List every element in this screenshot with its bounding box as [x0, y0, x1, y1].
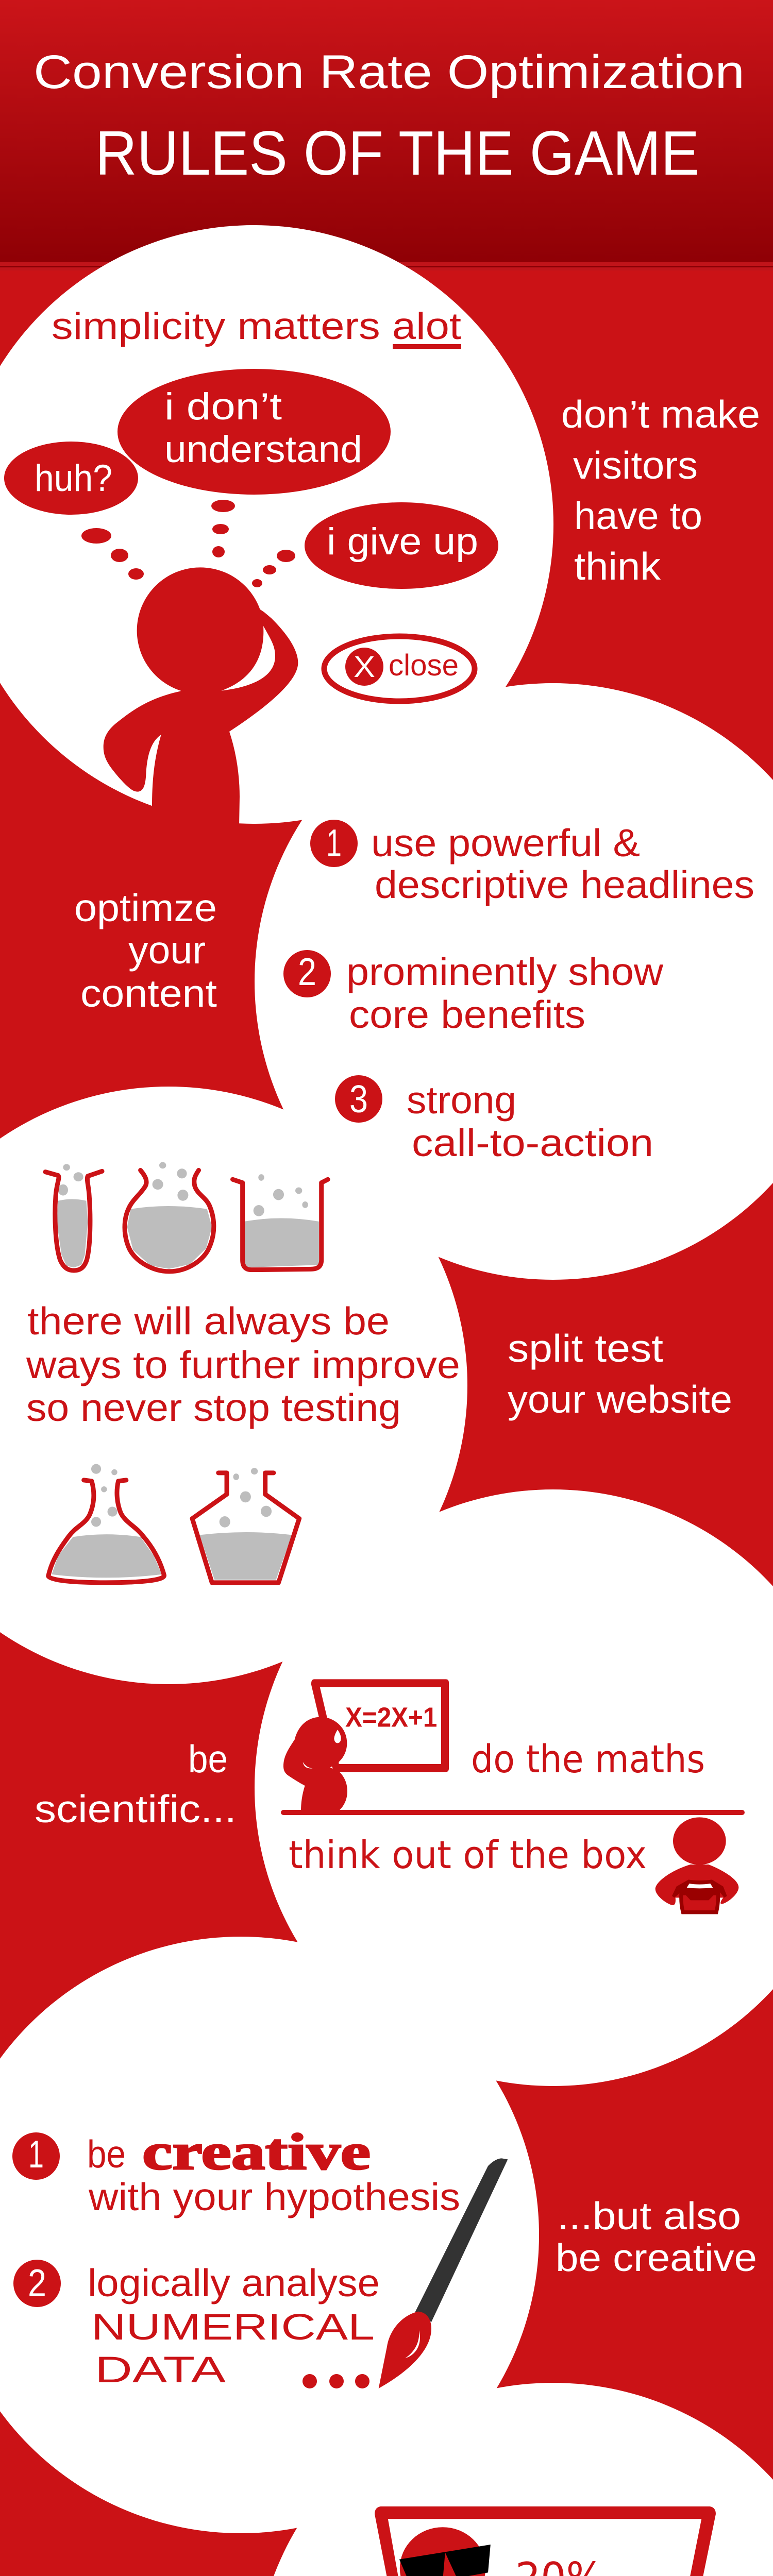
list item 2: logically analyse numerical data: DATA: [95, 2350, 226, 2391]
title: [33, 46, 745, 188]
side text: optimze your content: content: [80, 972, 217, 1015]
side text: be scientific...: be: [188, 1737, 228, 1781]
side text: optimze your content: optimze: [74, 886, 217, 929]
text: there will always be ways to further improve so never stop testing: there will always be: [27, 1299, 390, 1343]
list item 2: prominently show: [346, 950, 664, 993]
list item 2: 2: [298, 950, 316, 993]
text: do the maths: do the maths: [471, 1737, 705, 1782]
side text: ...but also be creative: [556, 2194, 757, 2279]
thought bubble: i don't understand: understand: [164, 429, 362, 470]
list item 3: call-to-action: [412, 1121, 653, 1164]
thought dots: [81, 500, 295, 587]
thought bubble: huh?: [4, 442, 138, 515]
list item 1: be creative with your hypothesis: [12, 2123, 460, 2218]
side text: be scientific...: scientific...: [35, 1787, 237, 1831]
icon: person at blackboard: [283, 1679, 449, 1811]
side text: split test your website: your website: [508, 1378, 732, 1421]
list item 2: core benefits: [349, 993, 585, 1036]
list item 2: [283, 950, 664, 1036]
side text: don't make visitors have to think: visitors: [573, 444, 698, 487]
illustration: banner ad with person in sunglasses: [375, 2506, 716, 2576]
panel: banner blindness: [17, 2506, 717, 2576]
panel: split test: [26, 1162, 732, 1583]
icon: lab flasks row two: [48, 1464, 299, 1583]
list item 1: be creative with your hypothesis: with your hypothesis: [88, 2175, 460, 2218]
text: there will always be ways to further improve so never stop testing: so never stop testing: [26, 1386, 401, 1429]
panel: optimize your content: [74, 820, 754, 1164]
side text: don't make visitors have to think: have to: [574, 494, 702, 537]
side text: ...but also be creative: ...but also: [557, 2194, 741, 2238]
thought bubble: i give up: i give up: [327, 521, 478, 563]
list item 1: be creative with your hypothesis: creative: [142, 2123, 371, 2180]
panel: simplicity: [4, 306, 760, 826]
side text: don't make visitors have to think: think: [574, 545, 661, 588]
icon: confused person scratching head: [104, 567, 298, 826]
list item 1: descriptive headlines: [375, 863, 754, 906]
thought bubble: i don't understand: i don’t: [164, 386, 282, 428]
side text: optimze your content: [74, 886, 217, 1015]
divider shelf: [281, 1810, 745, 1815]
thought bubble: i don't understand: [117, 369, 391, 495]
title: RULES OF THE GAME: [95, 118, 699, 188]
icon: paint brush: [379, 2158, 508, 2388]
text: think out of the box: think out of the box: [289, 1833, 647, 1877]
list item 1: 1: [326, 821, 342, 865]
side text: don't make visitors have to think: don’t make: [561, 393, 760, 436]
list item 3: strong: [407, 1078, 516, 1122]
icon: close button: [324, 636, 475, 701]
list item 2: logically analyse numerical data: NUMERICAL: [91, 2307, 375, 2348]
side text: be scientific...: [35, 1737, 237, 1831]
list item 3: [335, 1075, 653, 1164]
list item 1: be creative with your hypothesis: be: [87, 2132, 126, 2176]
list item 2: logically analyse numerical data: [13, 2260, 380, 2391]
list item 2: logically analyse numerical data: logically analyse: [88, 2261, 380, 2304]
title: Conversion Rate Optimization: [33, 46, 745, 98]
heading: simplicity matters alot: simplicity matters alot: [52, 306, 461, 347]
list item 1: use powerful &: [371, 821, 640, 865]
text: there will always be ways to further improve so never stop testing: ways to further improve: [26, 1343, 460, 1386]
icon: lab flasks row one: [45, 1162, 328, 1272]
icon: person holding box: [656, 1817, 738, 1912]
icon: close button: close: [389, 649, 459, 682]
thought bubble: huh?: huh?: [35, 457, 112, 499]
side text: don't make visitors have to think: [561, 393, 760, 588]
thought bubble: i give up: [305, 502, 498, 589]
panel: but also be creative: [12, 2123, 757, 2391]
list item 1: be creative with your hypothesis: 1: [28, 2132, 44, 2176]
header band: [0, 0, 773, 270]
side text: optimze your content: your: [128, 928, 206, 972]
side text: ...but also be creative: be creative: [556, 2236, 757, 2279]
icon: person at blackboard: X=2X+1: [345, 1703, 437, 1733]
side text: split test your website: [508, 1327, 732, 1421]
list item 2: logically analyse numerical data: 2: [28, 2261, 46, 2304]
list item 3: 3: [349, 1077, 368, 1121]
side text: split test your website: split test: [508, 1327, 663, 1370]
panel: be scientific: [35, 1679, 745, 1912]
list item 1: [310, 820, 754, 906]
text: there will always be ways to further improve so never stop testing: [26, 1299, 460, 1429]
icon: close button: X: [354, 650, 375, 684]
